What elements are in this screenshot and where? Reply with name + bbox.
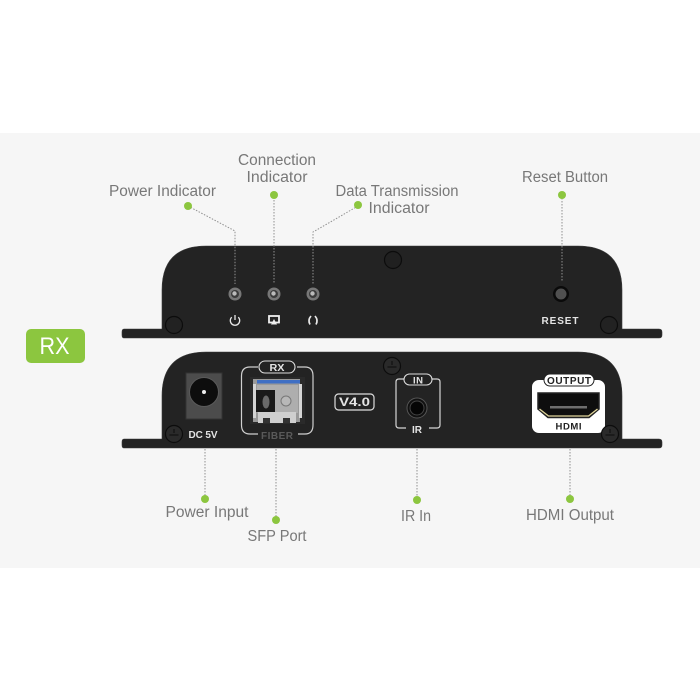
callout: Connection Indicator: Connection [238,152,316,169]
screw: centre [384,358,400,374]
callout: Power Indicator [109,183,235,284]
icon: monitor [269,316,279,324]
power LED [228,288,242,300]
DC 5V label: DC 5V [188,430,218,441]
callout: Connection Indicator: Indicator [246,169,308,186]
OUTPUT tag: OUTPUT [547,376,591,387]
badge: RX [26,329,85,363]
badge: RX: RX [40,333,70,360]
FIBER label: FIBER [261,431,294,442]
reset button [553,286,569,302]
callout: Data Transmission Indicator: Indicator [368,200,430,217]
reset label: RESET [542,316,578,327]
version tag: V4.0 [339,397,370,409]
icon: data arrows [309,316,317,324]
HDMI port [538,393,599,418]
IR label: IR [412,425,423,436]
SFP module [250,377,305,424]
callout: Connection Indicator [238,152,316,284]
callout: Data Transmission Indicator [313,183,458,284]
screw: bottom left [166,316,182,334]
IR port frame [396,374,440,436]
IN tag: IN [413,376,423,386]
callout: Reset Button [522,169,608,281]
callout: Power Input: Power Input [166,504,249,521]
SFP port frame [242,361,313,442]
data LED [306,288,320,300]
background band [0,133,700,568]
panel: top device front view [122,246,662,338]
version tag [335,394,374,410]
icon: power [230,315,240,325]
HDMI label: HDMI [556,422,582,432]
screw: top centre [384,252,402,268]
callout: HDMI Output: HDMI Output [526,507,615,524]
callout: Power Indicator: Power Indicator [109,183,216,200]
RX tag: RX [270,362,284,374]
HDMI output panel [532,374,605,433]
callout: IR In [401,449,431,525]
callout: Data Transmission Indicator: Data Transmission [336,183,458,200]
callout: Reset Button: Reset Button [522,169,608,186]
screw: bottom right [600,316,618,334]
DC power jack [186,373,222,419]
screw: left [166,426,182,442]
callout: HDMI Output [526,449,615,524]
callout: Power Input [166,449,249,521]
callout: SFP Port: SFP Port [248,528,307,545]
connection LED [268,288,280,300]
screw: right [602,426,618,442]
callout: IR In: IR In [401,508,431,525]
panel: bottom device rear view [122,352,662,448]
callout: SFP Port [248,449,307,545]
IR jack [407,398,427,418]
